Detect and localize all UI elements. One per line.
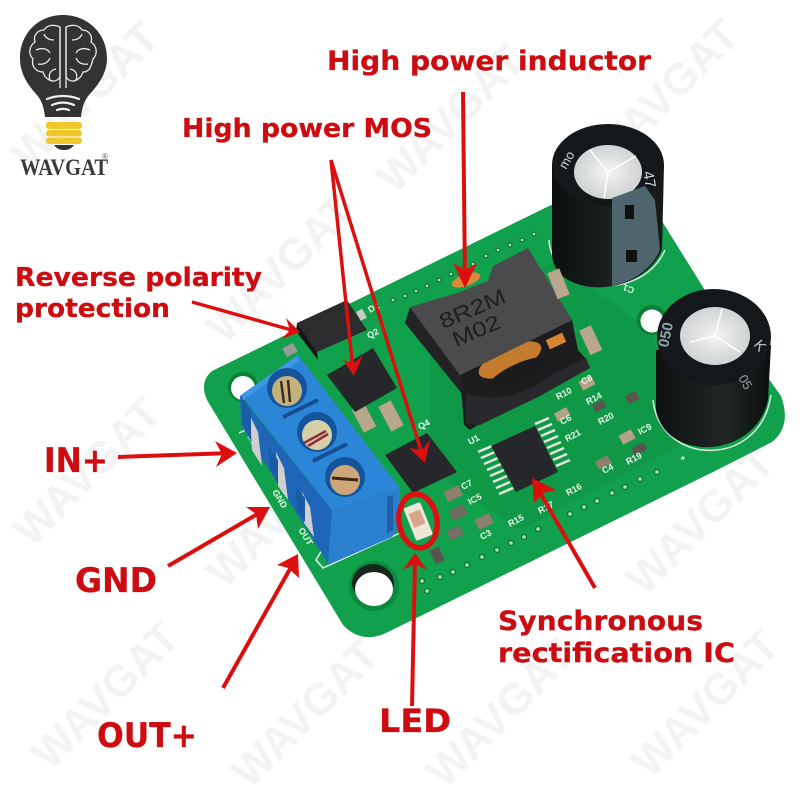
watermarks: WAVGAT xyxy=(22,612,189,779)
silk labels: C7 xyxy=(459,478,474,492)
silk labels: D2 xyxy=(366,301,381,315)
blue terminal block xyxy=(240,355,400,565)
IC U1 xyxy=(478,418,570,494)
silk labels: R14 xyxy=(584,390,604,407)
silk labels: + xyxy=(678,452,688,464)
arrow: LED xyxy=(403,553,427,706)
label: high power inductor: High power inductor xyxy=(327,46,652,77)
capacitor C1: 47 xyxy=(639,170,659,189)
silk labels: Q4 xyxy=(416,417,432,432)
circuit board photo xyxy=(204,124,785,637)
terminal screws xyxy=(267,368,365,497)
arrow: synchronous rectification IC xyxy=(532,478,595,588)
diode xyxy=(282,300,367,360)
WAVGAT logo xyxy=(20,15,108,180)
arrow: MOS to Q4 xyxy=(331,160,430,463)
label: IN+: IN+ xyxy=(44,441,108,481)
watermarks: WAVGAT xyxy=(617,437,784,604)
silk labels: R21 xyxy=(563,427,583,444)
label: high power MOS: High power MOS xyxy=(182,114,432,144)
arrow: MOS to Q2 xyxy=(331,160,363,376)
inductor: M02 xyxy=(449,311,504,352)
via dots xyxy=(391,232,660,594)
inductor: 8R2M xyxy=(436,285,509,334)
capacitor C2: 05 xyxy=(735,372,756,392)
silk labels: R10 xyxy=(554,385,574,402)
PCB xyxy=(204,172,785,637)
LED xyxy=(403,502,433,541)
logo wordmark: WAVGAT xyxy=(20,155,108,180)
silk labels: C3 xyxy=(478,528,493,542)
capacitor C2: K xyxy=(750,337,769,355)
capacitor C1: C1 xyxy=(621,282,636,296)
capacitor C1 xyxy=(549,124,665,296)
capacitor C1: mo xyxy=(556,148,578,172)
SMD parts xyxy=(352,268,647,564)
capacitor C2: 050 xyxy=(655,321,677,349)
arrow: inductor xyxy=(453,92,477,288)
capacitor C2 xyxy=(653,289,771,450)
silk labels: IC5 xyxy=(466,491,483,507)
silk labels: R17 xyxy=(536,499,556,516)
label: synchronous rectification IC: Synchronous xyxy=(498,606,703,637)
watermarks: WAVGAT xyxy=(197,185,364,352)
arrow: GND xyxy=(168,507,270,566)
terminal silk frame: IN+ xyxy=(245,433,261,450)
silk labels xyxy=(365,301,688,542)
registered mark: ® xyxy=(102,152,108,161)
arrow: OUT+ xyxy=(223,554,299,688)
silk labels: Q2 xyxy=(365,326,381,341)
watermarks: WAVGAT xyxy=(367,35,534,202)
silk labels: R19 xyxy=(624,450,644,467)
silk labels: R16 xyxy=(564,481,584,498)
silk labels: U1 xyxy=(466,433,481,447)
label: reverse polarity protection: Reverse polarity xyxy=(15,263,262,293)
watermarks: WAVGAT xyxy=(582,10,749,177)
mounting holes xyxy=(228,305,667,611)
label: reverse polarity protection: protection xyxy=(15,294,170,324)
watermarks: WAVGAT xyxy=(2,12,169,179)
watermarks: WAVGAT xyxy=(4,388,171,555)
silk labels: C4 xyxy=(600,462,615,476)
silk labels: IC9 xyxy=(636,421,653,437)
icon: light bulb with brain xyxy=(20,15,107,150)
silk labels: R15 xyxy=(506,512,526,529)
MOSFET Q4 xyxy=(385,433,457,493)
terminal silk frame xyxy=(239,428,400,568)
terminal silk frame: GND xyxy=(270,488,290,510)
label: OUT+: OUT+ xyxy=(97,716,197,756)
watermarks: WAVGAT xyxy=(197,430,364,597)
silk labels: R20 xyxy=(596,410,616,427)
label: synchronous rectification IC: rectification IC xyxy=(498,638,735,669)
arrow: IN+ xyxy=(118,441,237,467)
label: GND: GND xyxy=(75,561,157,601)
arrow: reverse polarity xyxy=(192,302,300,339)
watermarks: WAVGAT xyxy=(622,620,789,787)
inductor xyxy=(405,248,590,430)
silk labels: C8 xyxy=(579,373,594,387)
MOSFET Q2 xyxy=(327,348,397,412)
terminal silk frame: OUT xyxy=(296,526,315,548)
label: LED: LED xyxy=(379,702,451,740)
silk labels: C6 xyxy=(558,413,573,427)
LED highlight ring xyxy=(395,492,441,550)
